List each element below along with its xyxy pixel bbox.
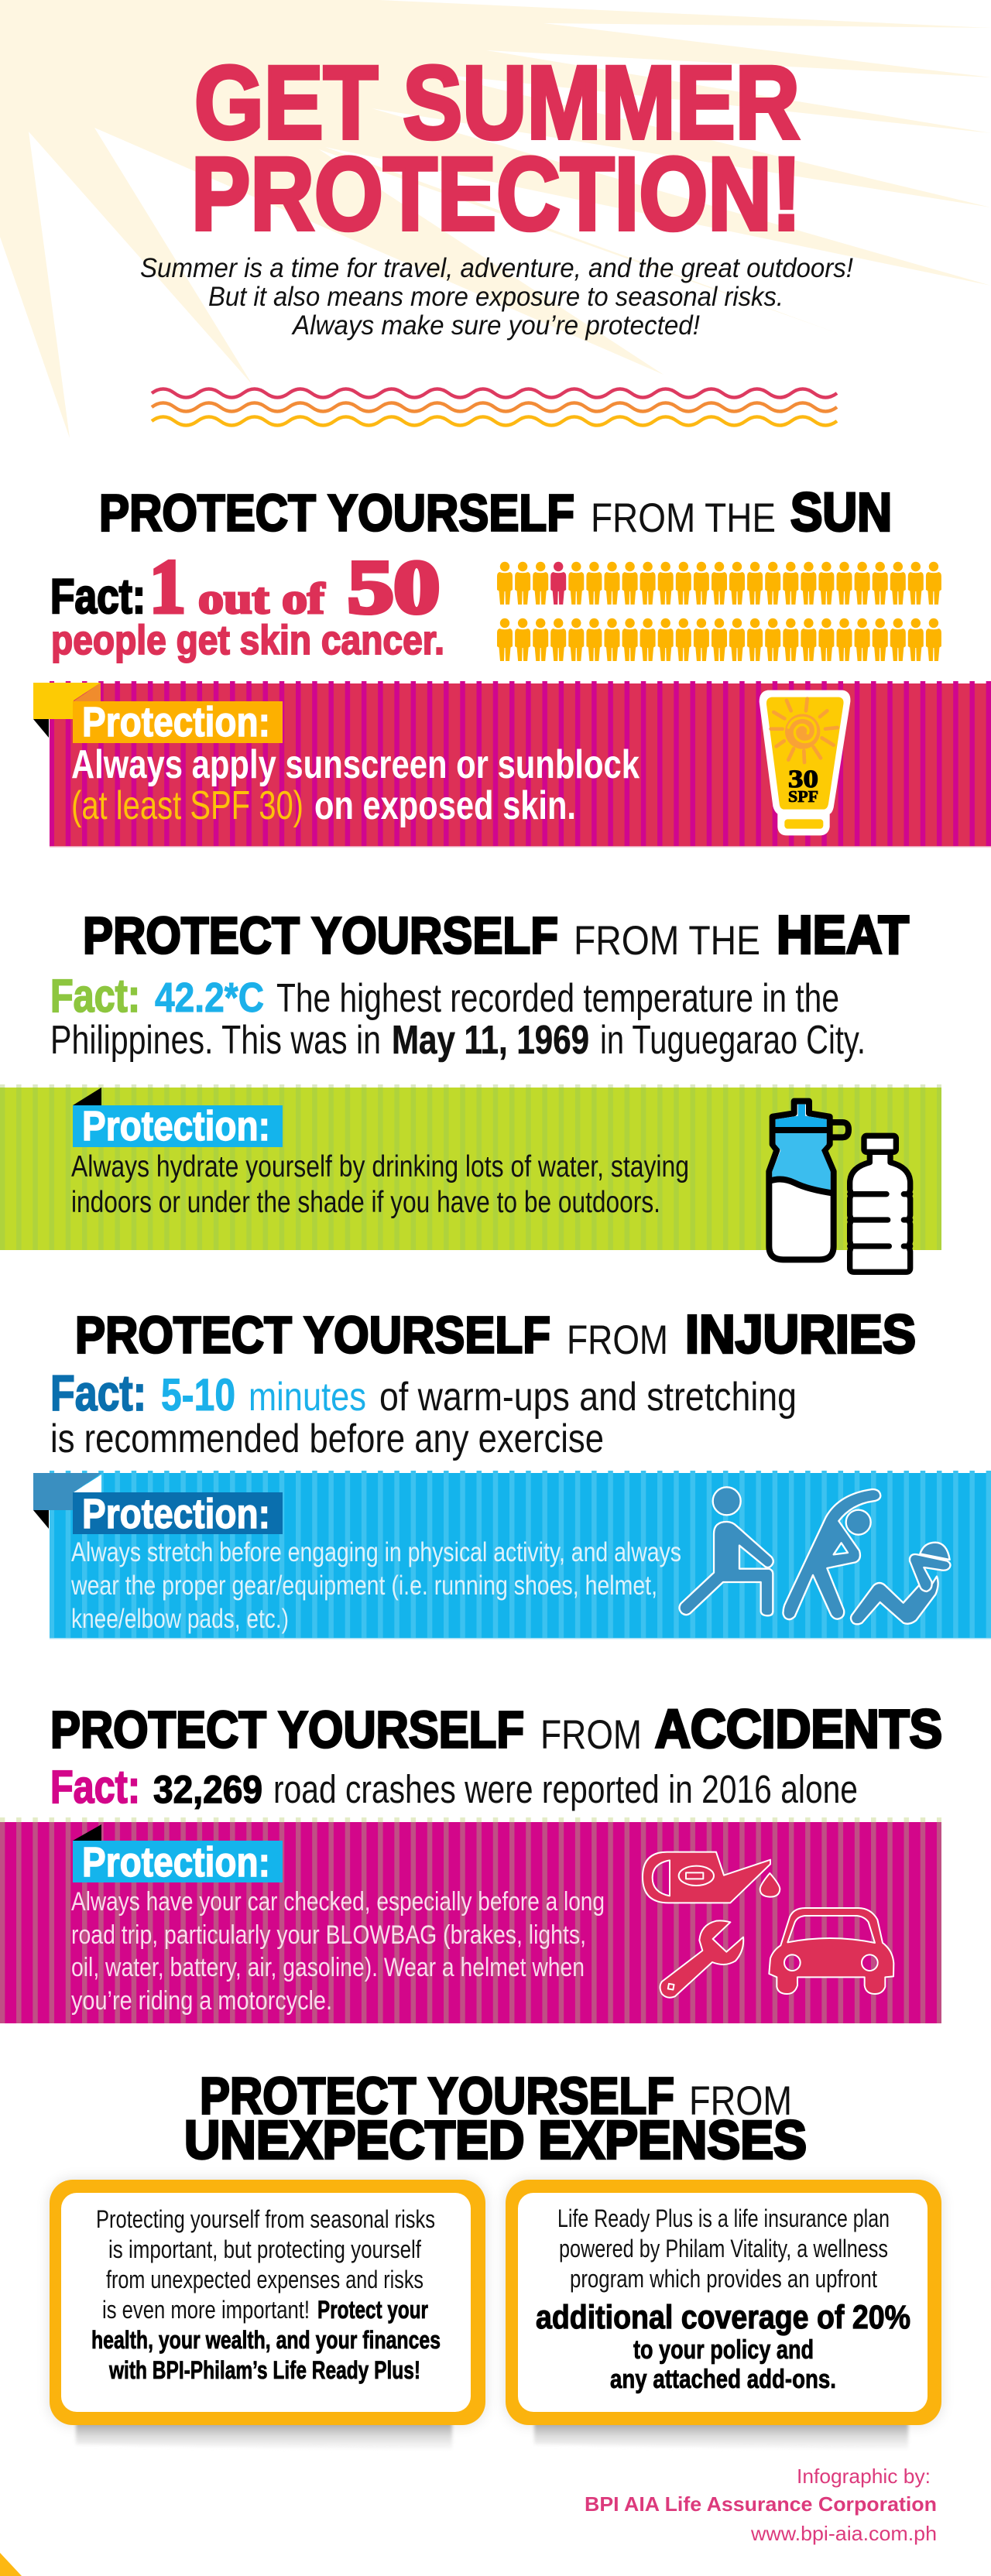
card text: with BPI-Philam’s Life Ready Plus! [108, 2356, 420, 2384]
protection text: Always hydrate yourself by drinking lots of water, staying [71, 1150, 689, 1184]
card text: Protect your [317, 2296, 428, 2324]
heading: sun: SUN [790, 481, 892, 542]
heading: heat [83, 904, 909, 964]
card text: powered by Philam Vitality, a wellness [559, 2235, 888, 2263]
corner triangle [0, 2553, 22, 2576]
panel: heat protection [0, 1084, 941, 1272]
heading: accidents [50, 1698, 942, 1759]
heading: unexpected expenses [184, 2067, 807, 2170]
fact: warm-ups: of warm-ups and stretching [379, 1375, 797, 1420]
credits: www.bpi-aia.com.ph [750, 2522, 937, 2545]
intro text: Summer is a time for travel, adventure, and the great outdoors! [140, 253, 853, 283]
icon: stretching figures [679, 1487, 950, 1624]
sun rays background [0, 0, 991, 438]
fact: highest temperature: 42.2*C [155, 975, 264, 1021]
fact: warm-ups [50, 1365, 797, 1461]
protection text [71, 1150, 689, 1219]
fact: skin cancer: 1 [149, 543, 186, 629]
fact: road crashes [50, 1761, 858, 1813]
flag: blue corner [33, 1473, 101, 1529]
protection label: Protection: [82, 699, 270, 745]
fact: road crashes: Fact: [50, 1761, 140, 1813]
fact: warm-ups: is recommended before any exercise [50, 1416, 604, 1461]
heading: accidents: ACCIDENTS [655, 1698, 942, 1759]
fact: highest temperature: in Tuguegarao City. [600, 1018, 866, 1063]
card text: any attached add-ons. [610, 2365, 836, 2394]
heading: sun: PROTECT YOURSELF [99, 485, 574, 542]
flag: black fold [73, 1824, 101, 1841]
heading: injuries: FROM [567, 1317, 668, 1363]
heading: accidents: FROM [540, 1712, 642, 1758]
protection label: Protection: [82, 1491, 270, 1537]
icon: car maintenance [643, 1852, 893, 1998]
credits: Infographic by: [797, 2465, 931, 2488]
protection text: you’re riding a motorcycle. [71, 1986, 332, 2016]
protection text: Always stretch before engaging in physical activity, and always [71, 1537, 681, 1567]
heading: injuries [75, 1303, 916, 1364]
protection text [71, 742, 640, 828]
heading: unexpected expenses: PROTECT YOURSELF [200, 2067, 674, 2126]
fact: road crashes: 32,269 [153, 1768, 262, 1811]
fact: warm-ups: 5-10 [161, 1370, 235, 1420]
intro text [140, 253, 853, 341]
card text: program which provides an upfront [570, 2265, 877, 2293]
card text: to your policy and [633, 2335, 814, 2365]
icon: sunscreen bottle: SPF [788, 787, 818, 806]
fact: warm-ups: minutes [249, 1375, 366, 1420]
card text: is important, but protecting yourself [108, 2235, 422, 2263]
protection label: Protection: [82, 1839, 270, 1886]
protection text: Always have your car checked, especially before a long [71, 1887, 605, 1917]
protection text [71, 1887, 605, 2016]
protection text: indoors or under the shade if you have to be outdoors. [71, 1186, 660, 1219]
fact: road crashes: road crashes were reported in 2016 alone [273, 1767, 858, 1811]
title: PROTECTION! [191, 136, 801, 252]
title [191, 45, 801, 252]
intro text: But it also means more exposure to seasonal risks. [208, 282, 784, 312]
heading: sun [99, 481, 892, 542]
flag: yellow corner [33, 683, 101, 738]
panel: right card [506, 2180, 941, 2451]
card text [536, 2204, 910, 2394]
card text: health, your wealth, and your finances [91, 2326, 441, 2354]
heading: injuries: PROTECT YOURSELF [75, 1307, 550, 1364]
heading: unexpected expenses: FROM [689, 2078, 792, 2124]
fact: highest temperature: May 11, 1969 [392, 1018, 589, 1063]
icon: water bottles [769, 1101, 910, 1272]
protection text: Always apply sunscreen or sunblock [71, 742, 640, 787]
heading: sun: FROM THE [591, 495, 776, 541]
heading: heat: HEAT [777, 904, 909, 964]
fact: highest temperature: The highest recorded temperature in the [276, 976, 839, 1021]
fact: highest temperature [50, 970, 866, 1063]
intro text: Always make sure you’re protected! [291, 310, 700, 341]
credits: BPI AIA Life Assurance Corporation [585, 2492, 937, 2516]
protection text: oil, water, battery, air, gasoline). Wear a helmet when [71, 1953, 585, 1982]
card text: Life Ready Plus is a life insurance plan [557, 2204, 890, 2232]
fact: highest temperature: Fact: [50, 970, 140, 1022]
wave divider [152, 389, 837, 426]
card text: Protecting yourself from seasonal risks [96, 2205, 435, 2233]
card text: additional coverage of 20% [536, 2299, 910, 2336]
fact: skin cancer: out of [198, 575, 326, 623]
flag: black fold [73, 1088, 101, 1105]
fact: skin cancer: 50 [348, 546, 440, 629]
fact: skin cancer: Fact: [50, 570, 146, 624]
protection text: road trip, particularly your BLOWBAG (brakes, lights, [71, 1920, 586, 1950]
fact: skin cancer: people get skin cancer. [51, 618, 444, 663]
credits [585, 2465, 937, 2545]
fact: highest temperature: Philippines. This was in [50, 1018, 381, 1063]
panel: injuries protection [33, 1471, 991, 1639]
heading: heat: PROTECT YOURSELF [83, 907, 558, 964]
card text [91, 2205, 441, 2384]
icon: sunscreen bottle: 30 [788, 766, 818, 793]
protection text [70, 1537, 681, 1634]
panel: sun protection [33, 681, 991, 847]
protection text: on exposed skin. [314, 783, 576, 828]
icon: sunscreen bottle [760, 690, 850, 835]
title: GET SUMMER [194, 45, 800, 161]
protection text: wear the proper gear/equipment (i.e. running shoes, helmet, [70, 1571, 657, 1601]
pictogram: 1 in 50 people [497, 562, 941, 661]
panel: left card [50, 2180, 485, 2451]
protection label: Protection: [82, 1103, 270, 1149]
fact: skin cancer [50, 543, 444, 663]
card text: from unexpected expenses and risks [106, 2266, 423, 2293]
heading: heat: FROM THE [574, 918, 760, 964]
protection text: knee/elbow pads, etc.) [71, 1604, 289, 1634]
heading: accidents: PROTECT YOURSELF [50, 1701, 524, 1759]
card text: is even more important! [102, 2296, 310, 2324]
heading: injuries: INJURIES [685, 1303, 916, 1364]
heading: unexpected expenses: UNEXPECTED EXPENSES [184, 2110, 807, 2170]
fact: warm-ups: Fact: [50, 1365, 146, 1421]
protection text: (at least SPF 30) [71, 783, 303, 828]
panel: accidents protection [0, 1817, 941, 2023]
